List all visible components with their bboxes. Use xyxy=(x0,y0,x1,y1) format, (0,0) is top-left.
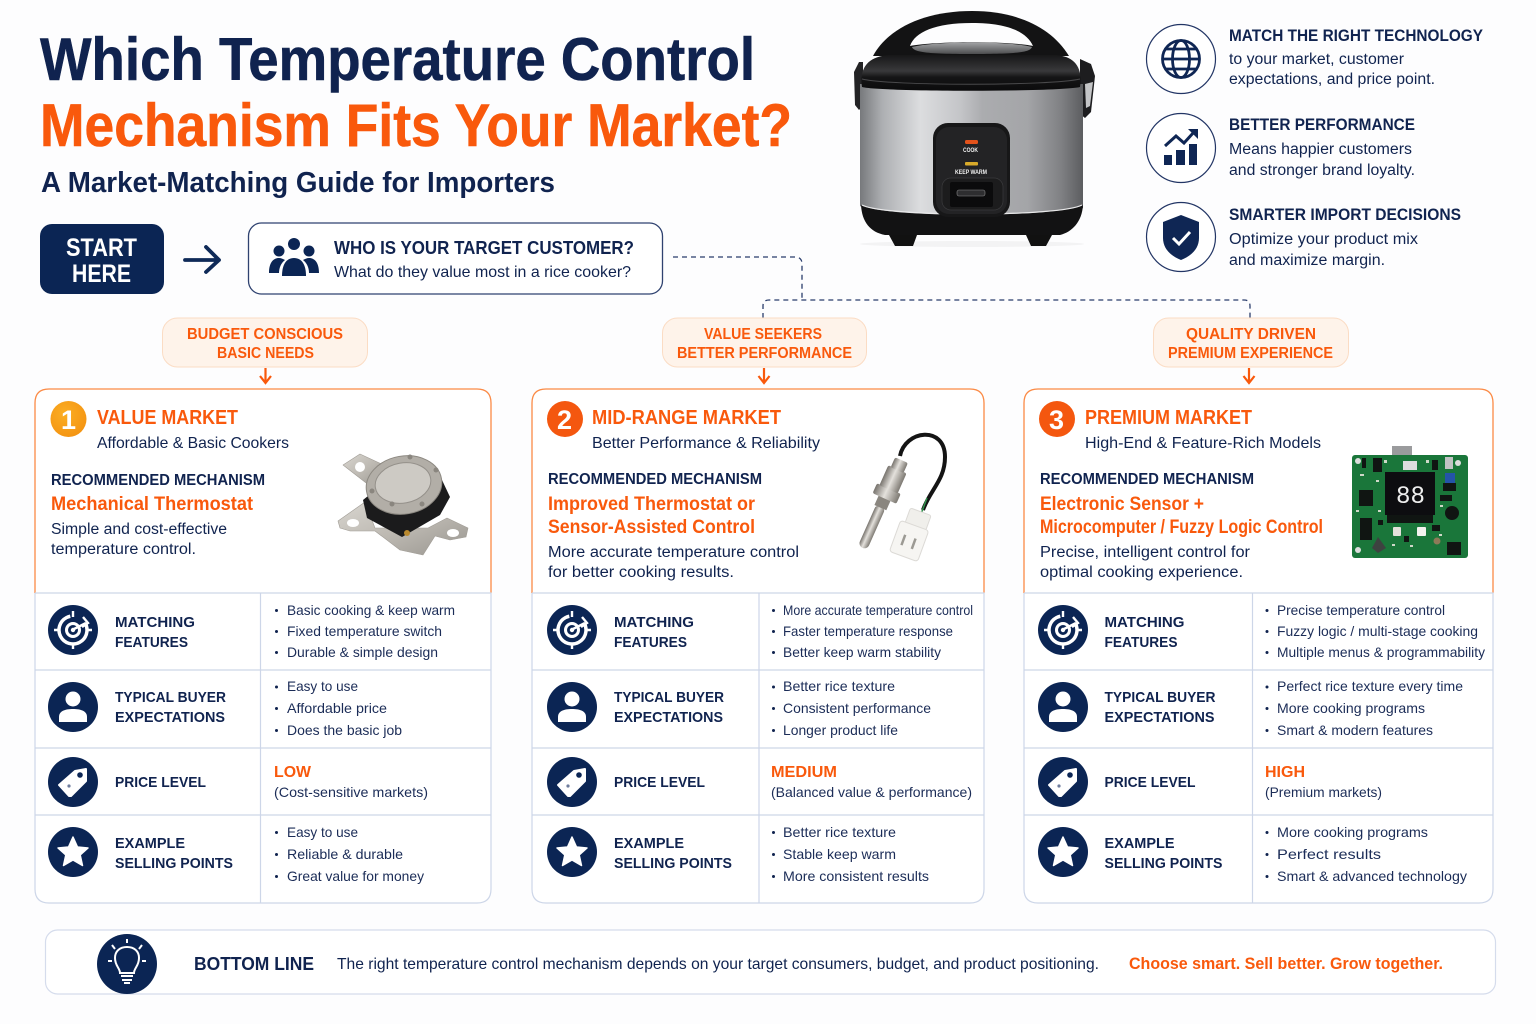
row: price level: PRICE LEVEL xyxy=(115,774,206,791)
row: matching features: More accurate temperature control xyxy=(783,602,973,618)
row: example selling points xyxy=(1038,824,1467,884)
icon: light bulb xyxy=(97,934,157,994)
row: price level: HIGH xyxy=(1265,764,1305,781)
segment pill: quality driven xyxy=(1154,318,1348,367)
row: typical buyer expectations: EXPECTATIONS xyxy=(614,709,723,726)
icon: growth chart xyxy=(1164,129,1198,165)
icon: globe xyxy=(1162,40,1200,78)
bottom line banner: Choose smart. Sell better. Grow together. xyxy=(1129,954,1443,973)
control panel xyxy=(933,123,1010,217)
row: matching features: MATCHING xyxy=(115,614,195,631)
row: example selling points: Great value for money xyxy=(287,868,424,884)
segment pill: budget conscious: BUDGET CONSCIOUS xyxy=(187,326,343,343)
base xyxy=(861,205,1083,235)
row: price level: (Balanced value & performance) xyxy=(771,784,972,800)
number badge 3: 3 xyxy=(1049,405,1064,435)
icon: shield check xyxy=(1163,215,1199,260)
panel: mid-range market xyxy=(532,389,984,903)
recommended mechanism: RECOMMENDED MECHANISM xyxy=(51,472,265,489)
row: matching features: Durable & simple design xyxy=(287,644,438,660)
row: example selling points: SELLING POINTS xyxy=(115,855,233,872)
image: mechanical thermostat xyxy=(338,450,468,555)
row: matching features: Better keep warm stability xyxy=(783,644,941,660)
heading: VALUE MARKET xyxy=(97,407,238,429)
row: matching features: MATCHING xyxy=(1104,614,1184,631)
benefit: smarter import decisions: and maximize margin. xyxy=(1229,252,1385,269)
row: price level: (Premium markets) xyxy=(1265,784,1382,800)
question box: WHO IS YOUR TARGET CUSTOMER? xyxy=(334,238,634,258)
row: typical buyer expectations: TYPICAL BUYER xyxy=(1104,689,1216,706)
segment pill: value seekers xyxy=(662,318,866,367)
row: typical buyer expectations: EXPECTATIONS xyxy=(115,709,225,726)
row: typical buyer expectations: More cooking programs xyxy=(1277,700,1425,716)
segment pill: budget conscious: BASIC NEEDS xyxy=(217,345,314,362)
benefit: match the right technology: to your market, customer xyxy=(1229,51,1404,68)
row: matching features: FEATURES xyxy=(115,634,188,651)
row: matching features: MATCHING xyxy=(614,614,694,631)
recommended mechanism: temperature control. xyxy=(51,541,196,558)
recommended mechanism: Improved Thermostat or xyxy=(548,493,755,515)
heading: Better Performance & Reliability xyxy=(592,435,820,452)
row: example selling points: Stable keep warm xyxy=(783,846,896,862)
panel: value market xyxy=(35,389,491,903)
recommended mechanism xyxy=(51,472,265,558)
recommended mechanism xyxy=(1040,471,1323,581)
rice cooker xyxy=(854,11,1095,247)
start here badge xyxy=(40,224,164,294)
recommended mechanism: Simple and cost-effective xyxy=(51,521,227,538)
segment pill: value seekers: BETTER PERFORMANCE xyxy=(677,345,852,362)
benefit: better performance: Means happier customers xyxy=(1229,141,1412,158)
row: example selling points: Perfect results xyxy=(1277,846,1381,862)
segment pill: quality driven: PREMIUM EXPERIENCE xyxy=(1168,345,1333,362)
segment pill: value seekers: VALUE SEEKERS xyxy=(704,326,822,343)
segment pill: quality driven: QUALITY DRIVEN xyxy=(1186,326,1316,343)
question box: What do they value most in a rice cooker? xyxy=(334,264,631,281)
number badge 1 xyxy=(50,401,86,437)
bottom line banner: BOTTOM LINE xyxy=(194,954,314,974)
row: matching features xyxy=(547,602,973,660)
row: typical buyer expectations: Does the basic job xyxy=(287,722,402,738)
row: example selling points xyxy=(547,824,929,884)
recommended mechanism: More accurate temperature control xyxy=(548,544,799,561)
heading: High-End & Feature-Rich Models xyxy=(1085,435,1321,452)
row: example selling points: EXAMPLE xyxy=(614,835,684,852)
benefit: better performance: BETTER PERFORMANCE xyxy=(1229,115,1415,134)
row: typical buyer expectations: Easy to use xyxy=(287,678,358,694)
row: matching features: Fixed temperature switch xyxy=(287,623,442,639)
row: typical buyer expectations: Longer product life xyxy=(783,722,898,738)
row: matching features: Multiple menus & programmability xyxy=(1277,644,1485,660)
recommended mechanism: Microcomputer / Fuzzy Logic Control xyxy=(1040,516,1323,538)
image: circuit board: 88 xyxy=(1396,482,1425,511)
row: price level xyxy=(1038,757,1382,807)
benefit: better performance: and stronger brand loyalty. xyxy=(1229,162,1415,179)
start here badge: HERE xyxy=(72,260,131,288)
row: typical buyer expectations: Consistent performance xyxy=(783,700,931,716)
recommended mechanism: RECOMMENDED MECHANISM xyxy=(548,471,762,488)
handle xyxy=(873,11,1069,56)
recommended mechanism: optimal cooking experience. xyxy=(1040,564,1243,581)
benefit: smarter import decisions: Optimize your product mix xyxy=(1229,231,1418,248)
row: typical buyer expectations: TYPICAL BUYER xyxy=(614,689,724,706)
start here badge: START xyxy=(66,234,137,262)
row: typical buyer expectations: Smart & modern features xyxy=(1277,722,1433,738)
recommended mechanism: Electronic Sensor + xyxy=(1040,493,1204,515)
number badge 3 xyxy=(1039,401,1075,437)
arrow: budget to value market xyxy=(260,368,271,383)
arrow: quality to premium market xyxy=(1244,368,1254,383)
row: price level xyxy=(48,757,428,807)
row: typical buyer expectations: EXPECTATIONS xyxy=(1104,709,1214,726)
heading: PREMIUM MARKET xyxy=(1085,407,1252,429)
bottom line banner xyxy=(46,930,1496,994)
rice cooker: COOK xyxy=(963,147,978,154)
benefit: smarter import decisions xyxy=(1146,202,1461,272)
number badge 2 xyxy=(547,401,583,437)
segment pill: budget conscious xyxy=(162,318,368,367)
row: price level xyxy=(547,757,972,807)
recommended mechanism xyxy=(548,471,799,581)
row: matching features: FEATURES xyxy=(614,634,687,651)
row: typical buyer expectations: Affordable price xyxy=(287,700,387,716)
row: typical buyer expectations: Perfect rice texture every time xyxy=(1277,678,1463,694)
row: matching features: Precise temperature control xyxy=(1277,602,1445,618)
row: example selling points: More consistent results xyxy=(783,868,929,884)
row: example selling points: Reliable & durable xyxy=(287,846,403,862)
row: example selling points: SELLING POINTS xyxy=(1104,855,1222,872)
row: example selling points: More cooking programs xyxy=(1277,824,1428,840)
row: price level: LOW xyxy=(274,764,312,781)
row: matching features: Basic cooking & keep warm xyxy=(287,602,455,618)
row: matching features: Fuzzy logic / multi-stage cooking xyxy=(1277,623,1478,639)
title: Which Temperature Control xyxy=(40,26,755,93)
row: matching features xyxy=(1038,602,1485,660)
benefit: match the right technology: MATCH THE RIGHT TECHNOLOGY xyxy=(1229,26,1484,45)
image: sensor probe xyxy=(851,435,945,562)
number badge 1: 1 xyxy=(61,405,76,435)
row: example selling points: EXAMPLE xyxy=(1104,835,1174,852)
icon: customers xyxy=(269,238,319,276)
benefit: better performance xyxy=(1146,114,1415,182)
bottom line banner: The right temperature control mechanism depends on your target consumers, budget, and product positioning. xyxy=(337,956,1099,973)
row: matching features: Faster temperature response xyxy=(783,623,953,639)
heading xyxy=(1085,407,1321,452)
recommended mechanism: Sensor-Assisted Control xyxy=(548,516,755,538)
question box xyxy=(248,223,662,294)
row: typical buyer expectations: Better rice texture xyxy=(783,678,895,694)
dashed connector xyxy=(673,257,1250,318)
image: circuit board xyxy=(1352,446,1468,558)
row: price level: MEDIUM xyxy=(771,764,837,781)
benefit: match the right technology xyxy=(1146,24,1484,94)
panel: premium market xyxy=(1024,389,1493,903)
row: typical buyer expectations xyxy=(547,678,931,738)
recommended mechanism: for better cooking results. xyxy=(548,564,734,581)
row: matching features: FEATURES xyxy=(1104,634,1178,651)
subtitle: A Market-Matching Guide for Importers xyxy=(41,167,555,199)
body xyxy=(860,84,1083,217)
row: price level: PRICE LEVEL xyxy=(614,774,705,791)
row: typical buyer expectations: TYPICAL BUYER xyxy=(115,689,226,706)
row: example selling points: Better rice texture xyxy=(783,824,896,840)
row: example selling points: SELLING POINTS xyxy=(614,855,732,872)
benefit: match the right technology: expectations, and price point. xyxy=(1229,71,1435,88)
heading xyxy=(97,407,289,452)
row: example selling points xyxy=(48,824,424,884)
heading: Affordable & Basic Cookers xyxy=(97,435,289,452)
row: price level: (Cost-sensitive markets) xyxy=(274,784,428,800)
side clips xyxy=(854,62,863,110)
row: price level: PRICE LEVEL xyxy=(1104,774,1196,791)
rice cooker: KEEP WARM xyxy=(955,169,987,176)
recommended mechanism: RECOMMENDED MECHANISM xyxy=(1040,471,1254,488)
row: matching features xyxy=(48,602,455,660)
title xyxy=(40,26,792,159)
row: example selling points: Easy to use xyxy=(287,824,358,840)
arrow: value seekers to mid-range market xyxy=(758,368,770,383)
row: typical buyer expectations xyxy=(1038,678,1463,738)
row: example selling points: Smart & advanced technology xyxy=(1277,868,1467,884)
recommended mechanism: Precise, intelligent control for xyxy=(1040,544,1250,561)
lid xyxy=(861,55,1081,91)
row: example selling points: EXAMPLE xyxy=(115,835,185,852)
number badge 2: 2 xyxy=(557,405,572,435)
row: typical buyer expectations xyxy=(48,678,402,738)
heading xyxy=(592,407,820,452)
arrow: start to question xyxy=(185,247,219,272)
heading: MID-RANGE MARKET xyxy=(592,407,781,429)
recommended mechanism: Mechanical Thermostat xyxy=(51,493,253,515)
benefit: smarter import decisions: SMARTER IMPORT DECISIONS xyxy=(1229,205,1461,224)
title: Mechanism Fits Your Market? xyxy=(40,92,792,159)
